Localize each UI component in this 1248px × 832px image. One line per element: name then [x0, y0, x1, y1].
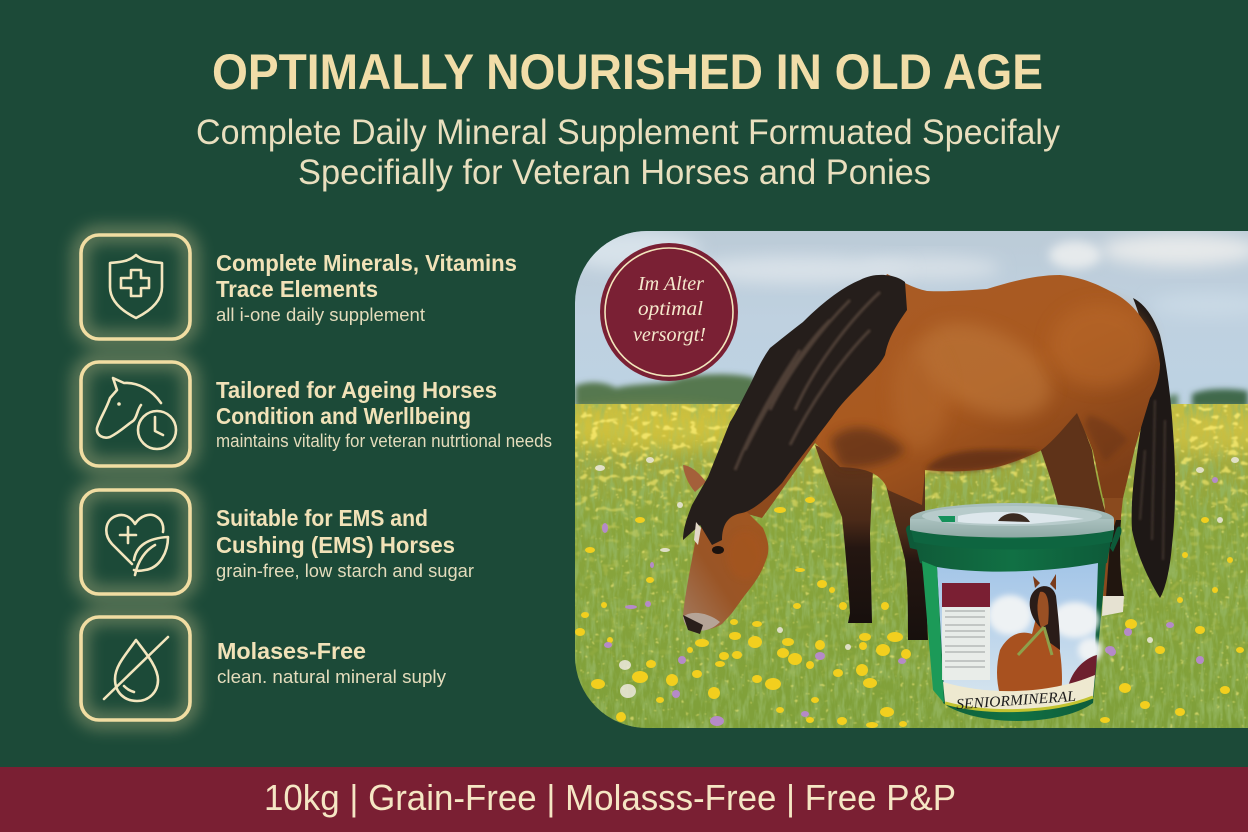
subtitle	[196, 113, 1060, 192]
photo panel: horse grazing in meadow	[540, 230, 1248, 728]
white flowers	[595, 457, 1239, 698]
far fore leg	[815, 445, 873, 623]
meadow	[540, 404, 1248, 728]
badge: versorgt!	[633, 324, 706, 346]
feature description: grain-free, low starch and sugar	[216, 561, 474, 581]
feature heading: Complete Minerals, Vitamins	[216, 250, 517, 276]
feature 4: molasses free	[80, 616, 446, 721]
label band	[943, 675, 1095, 711]
badge: Im Alter	[637, 273, 704, 295]
bucket label	[937, 563, 1098, 698]
neck underside	[746, 436, 818, 518]
yellow flowers	[575, 497, 1244, 728]
near fore leg	[886, 470, 928, 640]
feature 2: ageing horses: Condition and Werllbeing	[216, 403, 471, 429]
title: OPTIMALLY NOURISHED IN OLD AGE	[212, 44, 1043, 100]
lower hind leg	[1103, 490, 1124, 597]
feature 2: ageing horses	[80, 361, 552, 466]
ears	[683, 465, 706, 492]
icon: crossed-out drop	[80, 616, 191, 721]
bottom banner	[0, 767, 1248, 832]
product bucket: SENIORMINERAL	[956, 689, 1076, 713]
feature 1: complete minerals	[80, 234, 517, 339]
icon: shield with cross	[80, 234, 191, 339]
label horse	[997, 618, 1062, 695]
badge: optimal	[638, 298, 703, 320]
muscle shading	[830, 303, 1150, 471]
bottom banner: 10kg | Grain-Free | Molasss-Free | Free P&P	[264, 777, 956, 818]
horse	[683, 274, 1175, 640]
feature heading: Molases-Free	[217, 638, 366, 664]
treeline	[575, 374, 1248, 408]
head	[683, 500, 768, 630]
feature 3: EMS and Cushing	[80, 489, 474, 594]
body	[815, 274, 1160, 505]
feature 1: complete minerals: Trace Elements	[216, 276, 378, 302]
badge	[600, 243, 738, 381]
purple flowers	[602, 477, 1218, 726]
feature description: all i-one daily supplement	[216, 305, 425, 325]
label maroon seal	[1068, 655, 1097, 684]
product bucket	[906, 503, 1121, 721]
label text panel	[942, 607, 990, 680]
far hind leg	[1040, 410, 1106, 514]
subtitle: Specifially for Veteran Horses and Ponies	[298, 153, 931, 192]
foreground flowers	[575, 457, 1244, 728]
tail	[1132, 298, 1175, 598]
feature heading: Tailored for Ageing Horses	[216, 377, 497, 403]
icon: heart with leaf	[80, 489, 191, 594]
icon: horse head with clock	[80, 361, 191, 466]
feature description: clean. natural mineral suply	[217, 667, 446, 687]
feature 3: EMS and Cushing: Cushing (EMS) Horses	[216, 532, 455, 558]
feature heading: Suitable for EMS and	[216, 505, 428, 531]
feature description: maintains vitality for veteran nutrtional needs	[216, 431, 552, 451]
sky	[560, 230, 1248, 411]
mane	[683, 275, 907, 545]
subtitle: Complete Daily Mineral Supplement Formuated Specifaly	[196, 113, 1060, 152]
